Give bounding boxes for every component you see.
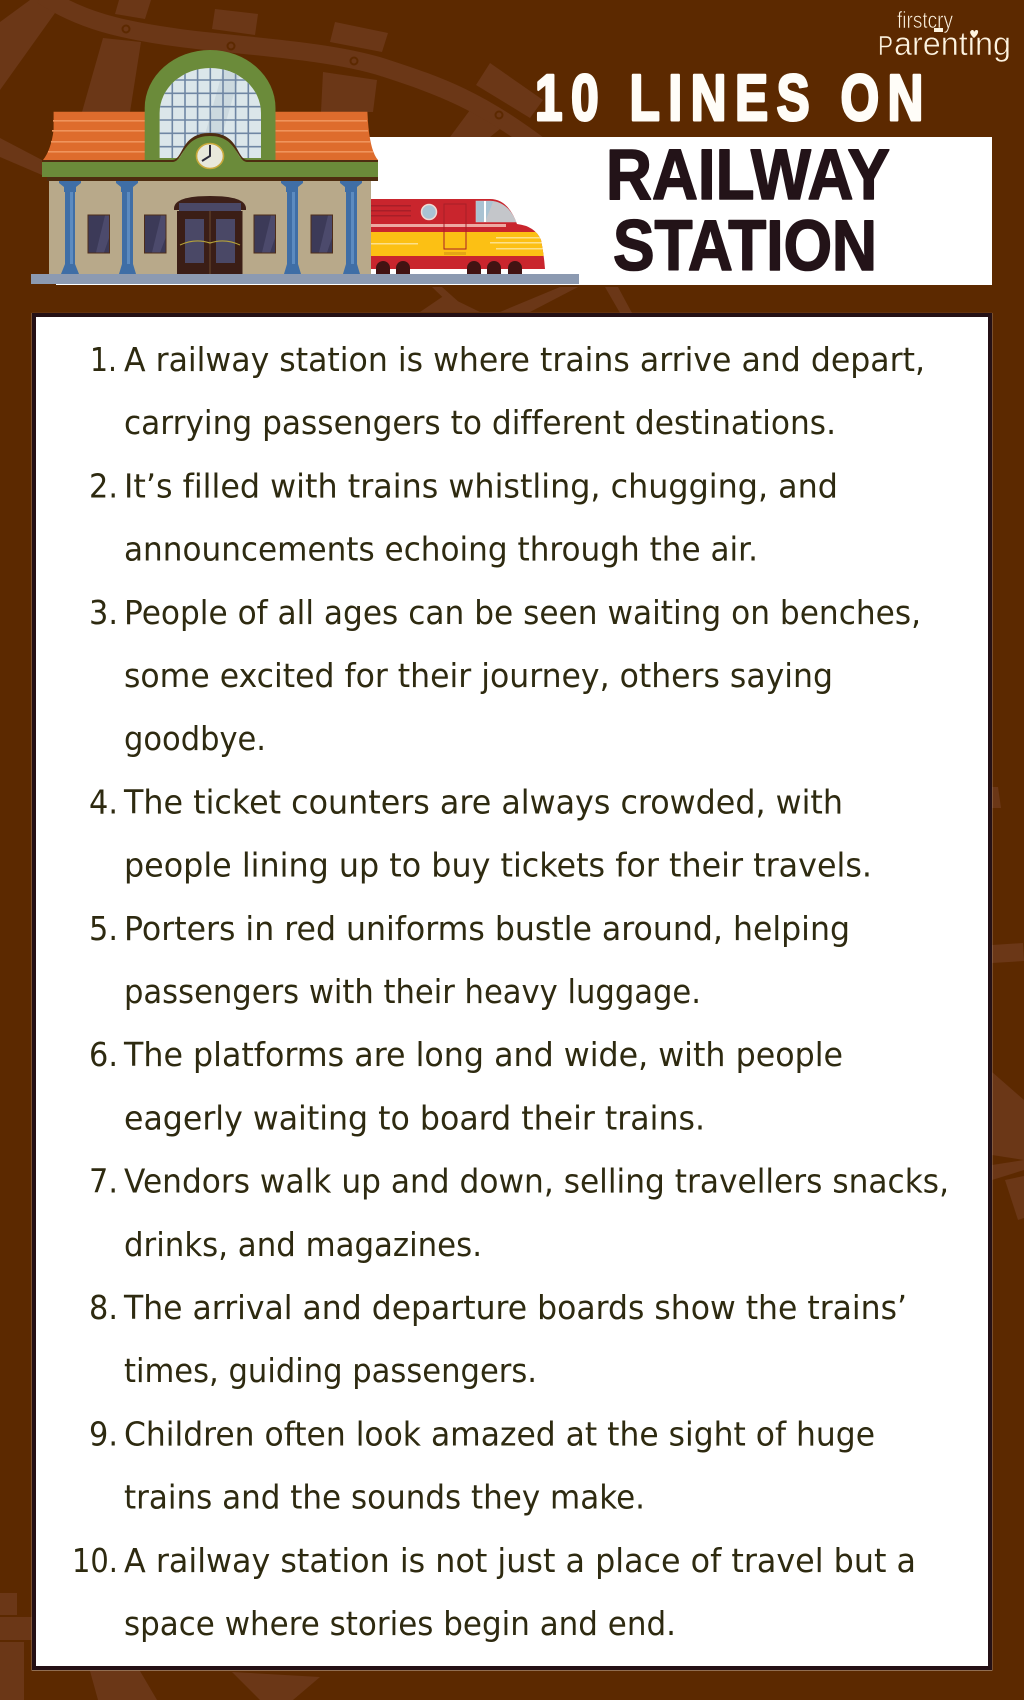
list item 8: The arrival and departure boards show the trains’	[123, 1288, 907, 1327]
list item 1: A railway station is where trains arrive and depart,	[124, 340, 925, 379]
list item 2: announcements echoing through the air.	[124, 530, 758, 569]
list item 2	[89, 466, 838, 569]
title: RAILWAY STATION	[606, 136, 890, 286]
station roof	[43, 112, 378, 160]
list item 3: some excited for their journey, others saying	[124, 656, 833, 695]
green arch	[145, 50, 276, 160]
list item 5: passengers with their heavy luggage.	[124, 972, 701, 1011]
clock	[196, 144, 224, 168]
list item 8: 8.	[89, 1288, 118, 1327]
list item 1: 1.	[90, 340, 117, 379]
title: RAILWAY STATION: RAILWAY	[606, 136, 890, 215]
columns	[59, 181, 362, 274]
list item 1	[90, 340, 925, 442]
list item 2: It’s filled with trains whistling, chugging, and	[124, 466, 838, 505]
list item 5: 5.	[89, 909, 118, 948]
list item 8: times, guiding passengers.	[124, 1351, 537, 1390]
list item 10: A railway station is not just a place of travel but a	[124, 1541, 916, 1580]
title banner: white background	[56, 137, 992, 285]
logo: FirstCry Parenting: arenting	[894, 25, 1011, 62]
illustration: station building	[42, 50, 378, 274]
list item 3: goodbye.	[124, 719, 266, 758]
list item 4: people lining up to buy tickets for their travels.	[124, 846, 872, 885]
title: RAILWAY STATION: STATION	[613, 207, 877, 286]
windows	[88, 215, 332, 253]
arched glass window	[159, 66, 262, 160]
list item 6: 6.	[89, 1035, 118, 1074]
list item 7	[89, 1162, 949, 1264]
list item 9: 9.	[89, 1414, 118, 1453]
list item 6	[89, 1035, 843, 1137]
list item 5: Porters in red uniforms bustle around, helping	[124, 909, 850, 948]
list item 4	[89, 782, 872, 885]
list item 9: trains and the sounds they make.	[124, 1478, 645, 1517]
list item 9	[89, 1414, 875, 1517]
list item 3: People of all ages can be seen waiting on benches,	[124, 593, 921, 632]
list item 8	[89, 1288, 907, 1390]
list item 1: carrying passengers to different destinations.	[124, 403, 836, 442]
list item 3: 3.	[89, 593, 118, 632]
list item 3	[89, 593, 921, 758]
list item 7: Vendors walk up and down, selling travellers snacks,	[124, 1162, 949, 1201]
list item 6: The platforms are long and wide, with people	[123, 1035, 843, 1074]
list item 4: The ticket counters are always crowded, with	[123, 782, 843, 821]
list item 5	[89, 909, 850, 1011]
green band with clock pediment	[42, 134, 378, 177]
list item 10	[72, 1541, 916, 1643]
logo: FirstCry Parenting: firstcry	[897, 7, 953, 33]
logo: FirstCry Parenting: P	[878, 30, 893, 61]
illustration: platform	[31, 274, 579, 284]
list item 10: space where stories begin and end.	[124, 1604, 676, 1643]
list item 6: eagerly waiting to board their trains.	[124, 1098, 705, 1137]
list item 2: 2.	[89, 466, 118, 505]
illustration: train	[371, 199, 551, 274]
title line: 10 LINES ON: 10 LINES ON	[535, 63, 923, 135]
list item 7: 7.	[89, 1162, 118, 1201]
entrance door	[174, 196, 246, 274]
station wall	[49, 181, 371, 274]
list item 9: Children often look amazed at the sight of huge	[124, 1414, 875, 1453]
list item 4: 4.	[89, 782, 118, 821]
list item 10: 10.	[72, 1541, 118, 1580]
list item 7: drinks, and magazines.	[124, 1225, 482, 1264]
list panel	[32, 313, 992, 1670]
logo: FirstCry Parenting	[878, 7, 1011, 62]
